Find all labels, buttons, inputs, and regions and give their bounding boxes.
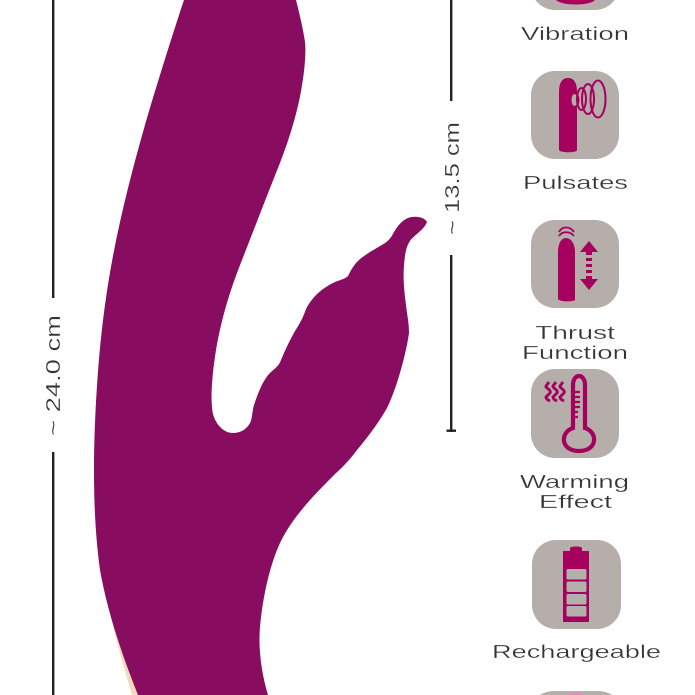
label: Pulsates: Pulsates <box>523 172 628 193</box>
icon: next feature tile, cropped at bottom edge <box>540 691 612 695</box>
label: Thrust Function: Function <box>522 342 628 363</box>
label: Thrust Function: Thrust <box>535 322 615 343</box>
product silhouette <box>94 0 427 695</box>
feature: warming effect <box>520 369 629 512</box>
feature: rechargeable <box>492 540 661 662</box>
icon: vibration <box>531 0 619 10</box>
feature: pulsates <box>523 71 628 193</box>
icon: pulsating shaft with rings <box>531 71 619 159</box>
dimension: insertable length 13.5 cm: ~ 13.5 cm <box>442 122 464 235</box>
label: Warming Effect: Effect <box>539 491 612 512</box>
feature: vibration <box>521 0 629 44</box>
dimension: overall length 24.0 cm: ~ 24.0 cm <box>43 315 65 436</box>
label: Warming Effect: Warming <box>520 471 629 492</box>
icon: thermometer with heat waves <box>531 369 619 458</box>
label: Rechargeable: Rechargeable <box>492 641 661 662</box>
cream base edge of product <box>100 565 145 695</box>
feature: thrust function <box>522 220 628 363</box>
label: Warming Effect <box>520 471 629 512</box>
label: Vibration: Vibration <box>521 23 629 44</box>
icon: battery <box>532 540 621 629</box>
label: Thrust Function <box>522 322 628 363</box>
icon: shaft with up-down arrow <box>531 220 619 308</box>
